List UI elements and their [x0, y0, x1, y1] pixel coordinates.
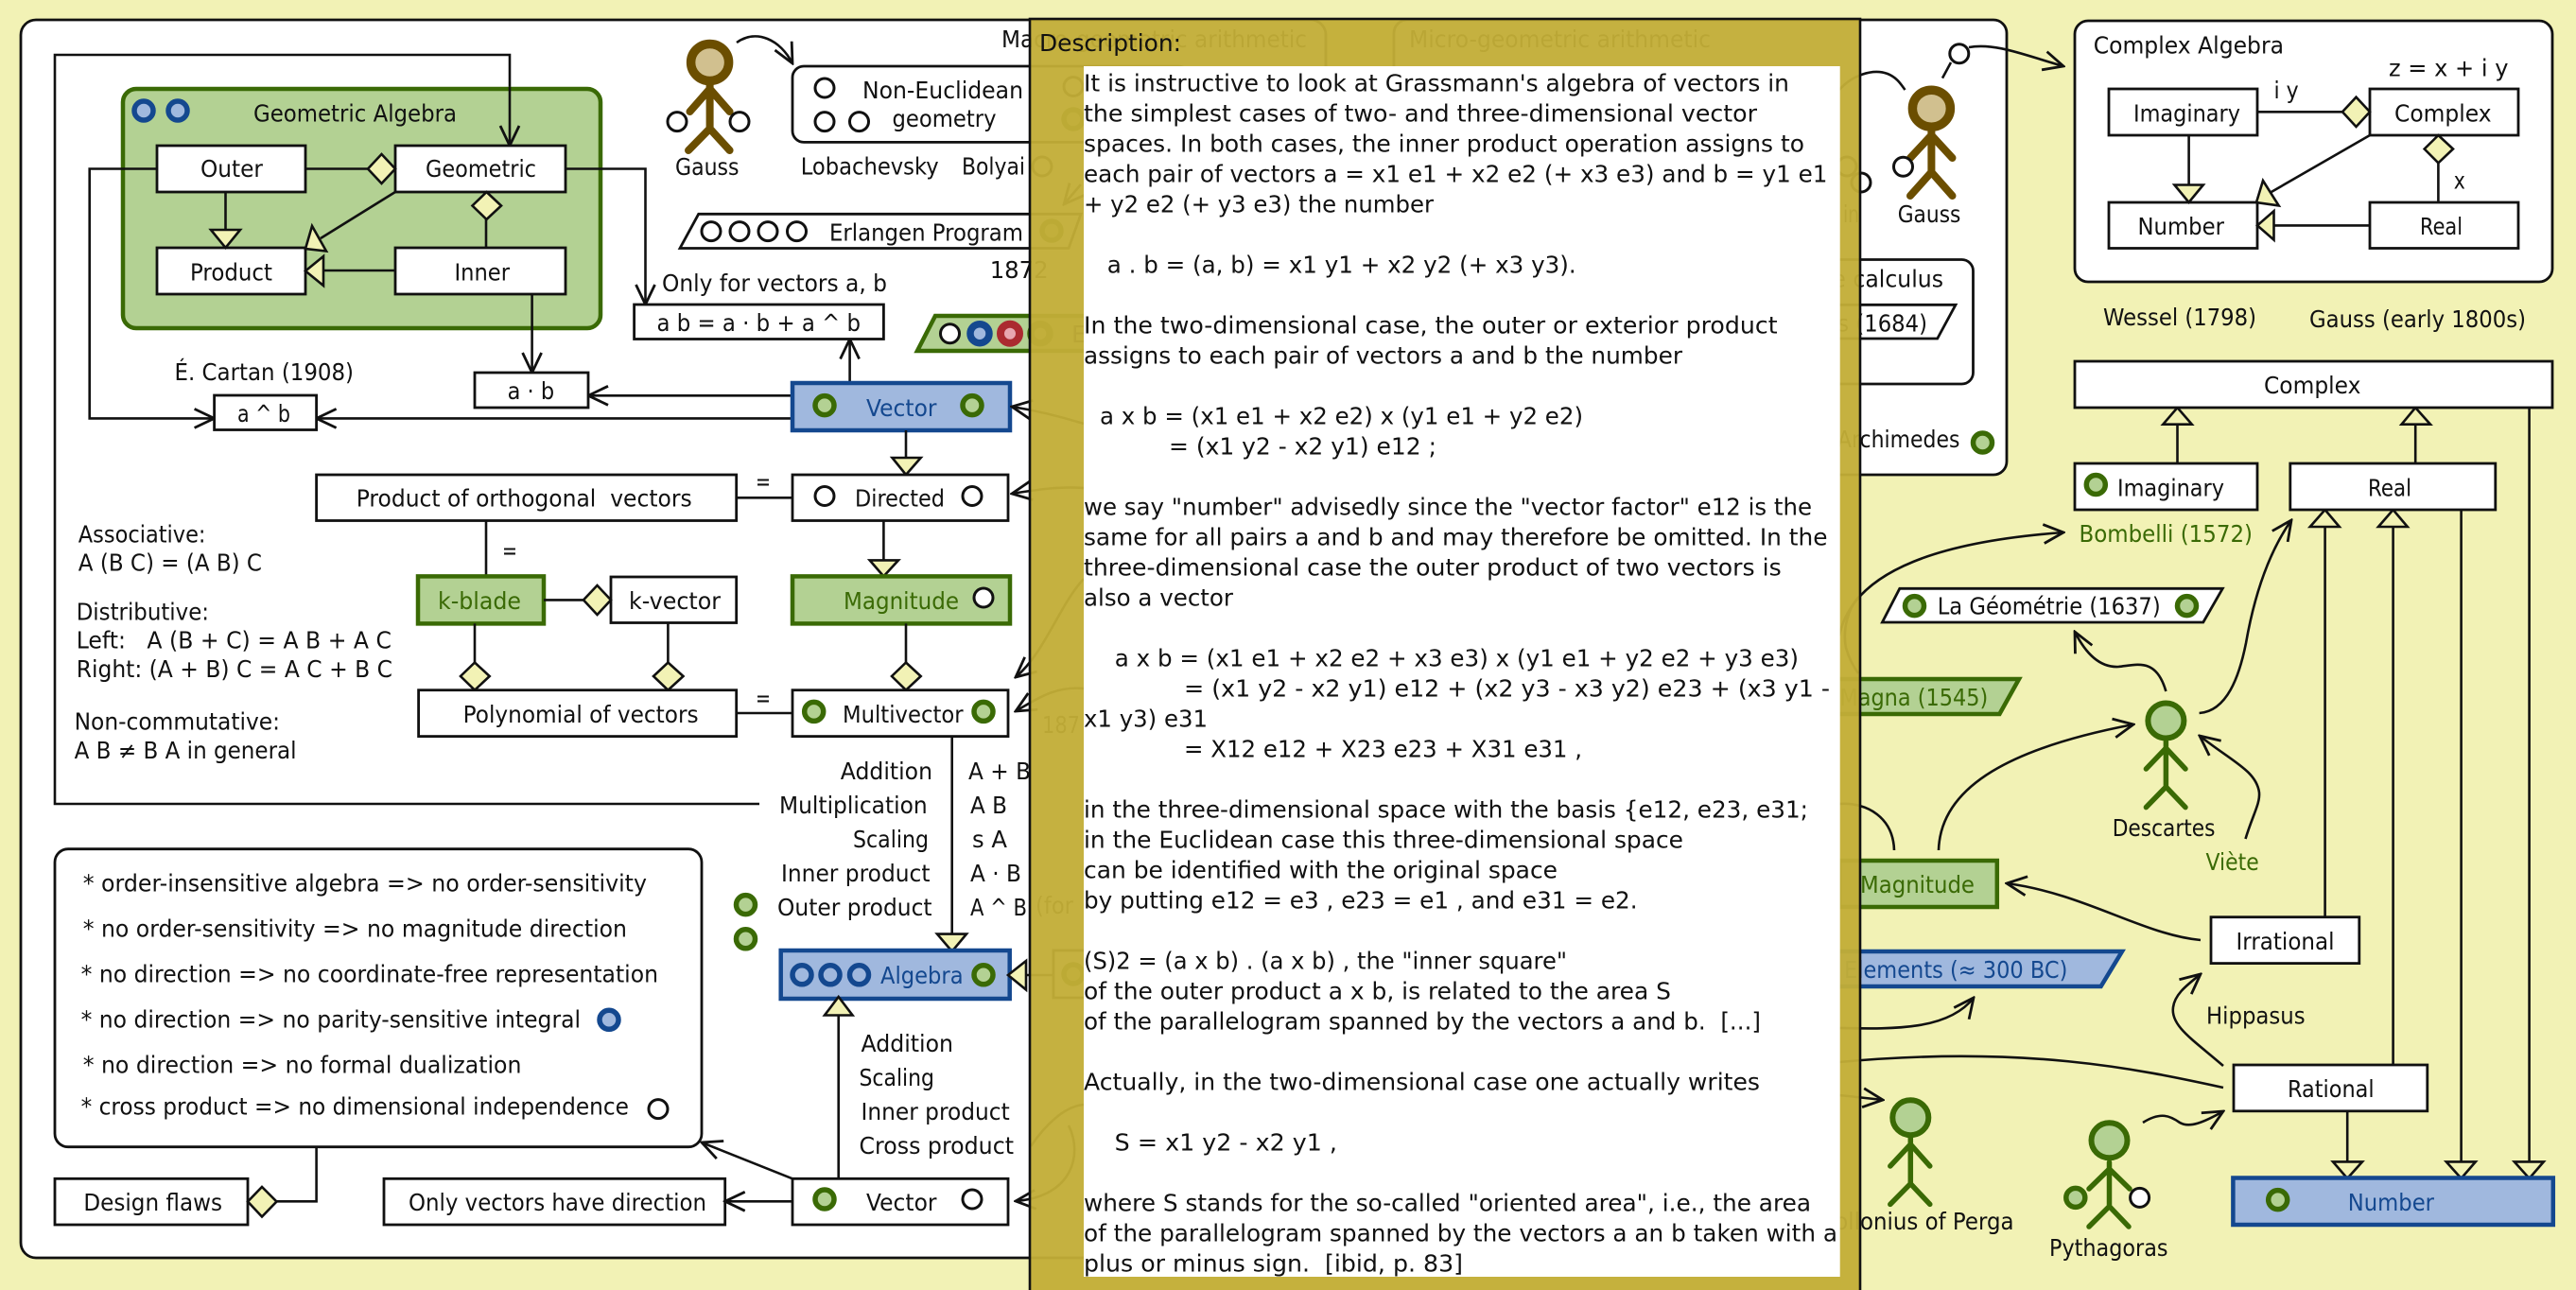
text block: vector operations: Addition — [861, 1030, 953, 1057]
text panel: Grassmann quotation: the simplest cases of two- and three-dimensional vector — [1084, 99, 1758, 127]
text panel: Grassmann quotation: = (x1 y2 - x2 y1) e12 + (x2 y3 - x3 y2) e23 + (x3 y1 - — [1184, 674, 1830, 702]
connectors: diamonds to polynomial and multivector — [461, 622, 921, 690]
box: Magnitude right: Magnitude — [1860, 871, 1975, 898]
connectors: Geometric to ab, Inner to a.b, Outer to a^b — [90, 168, 850, 418]
box: Vector blue: Vector — [866, 394, 937, 422]
panel: design flaw list — [55, 849, 702, 1147]
box: Vector white — [792, 1178, 1008, 1225]
figure: Gauss right — [1837, 44, 1969, 228]
box: Inner — [395, 248, 566, 294]
labels: Wessel and Gauss: Wessel (1798) — [2103, 304, 2256, 331]
panel: Micro-geometric arithmetic — [1394, 20, 2007, 475]
box: Product — [157, 248, 305, 294]
box: Number: Number — [2137, 213, 2225, 240]
box: Real: Real — [2420, 213, 2463, 240]
box: k-vector — [611, 577, 737, 622]
panel: Description overlay — [1030, 19, 1860, 1290]
text panel: Grassmann quotation: of the parallelogram spanned by the vectors a an b taken with a — [1084, 1219, 1837, 1246]
tag: La Géométrie: La Géométrie (1637) — [1938, 592, 2161, 620]
tag: Elements — [1778, 951, 2122, 986]
box: Real large: Real — [2368, 475, 2411, 502]
text panel: Grassmann quotation: (S)2 = (a x b) . (a x b) , the "inner square" — [1084, 947, 1567, 974]
curves: Gauss connections — [1839, 46, 2063, 90]
box: Imaginary with dot — [2075, 463, 2257, 510]
figure: Gauss left — [668, 44, 749, 181]
connectors: design flaws — [248, 1142, 792, 1216]
text panel: Grassmann quotation: In the two-dimensional case, the outer or exterior product — [1084, 311, 1778, 339]
box: Outer — [157, 146, 305, 192]
box: Product of orthogonal vectors: Product of orthogonal vectors — [357, 485, 692, 513]
curved arrows: history of number — [1839, 520, 2291, 1124]
figure: Pythagoras: Pythagoras — [2049, 1234, 2167, 1262]
box: Non-Euclidean geometry — [792, 66, 1190, 142]
text block: algebra laws: Non-commutative: — [75, 708, 280, 736]
box: Vector white: Vector — [866, 1189, 937, 1216]
box: Number — [2109, 202, 2257, 248]
box: a wedge b — [215, 395, 317, 429]
label: Cartan: É. Cartan (1908) — [174, 358, 354, 386]
text panel: Grassmann quotation: Actually, in the two-dimensional case one actually writes — [1084, 1068, 1760, 1095]
box: Magnitude: Magnitude — [844, 587, 959, 615]
tag: Erlangen Program — [680, 214, 1081, 248]
tag: Ars Magna: Ars Magna (1545) — [1799, 684, 1988, 711]
box: calculus: Nova Methodus (1684) — [1681, 309, 1927, 337]
box: Imaginary: Imaginary — [2133, 100, 2240, 128]
text block: operations left: Addition — [841, 758, 932, 785]
box: a dot b — [475, 373, 588, 408]
text block: vector operations — [859, 1030, 1014, 1159]
text panel: Grassmann quotation: of the outer product a x b, is related to the area S — [1084, 977, 1671, 1004]
connectors: equality links: = — [756, 685, 771, 712]
text panel: Grassmann quotation: S = x1 y2 - x2 y1 , — [1115, 1128, 1337, 1156]
box: calculus — [1608, 259, 1973, 384]
box: a dot b: a · b — [508, 377, 554, 405]
text panel: Grassmann quotation — [1084, 66, 1840, 1277]
text block: algebra laws: Distributive: — [77, 598, 209, 625]
inheritance: Directed to Magnitude — [870, 520, 898, 576]
text panel: Grassmann quotation: = (x1 y2 - x2 y1) e12 ; — [1169, 432, 1436, 460]
box: ab formula — [635, 305, 883, 339]
text panel: Grassmann quotation: by putting e12 = e3 , e23 = e1 , and e31 = e2. — [1084, 886, 1638, 914]
figure: Pythagoras — [2049, 1123, 2167, 1262]
box: Polynomial of vectors: Polynomial of vectors — [463, 701, 699, 728]
box: Multivector — [792, 690, 1008, 737]
text block: algebra laws — [75, 521, 392, 764]
text block: operations left: Outer product — [777, 894, 932, 921]
text panel: Grassmann quotation: of the parallelogram spanned by the vectors a and b. [...] — [1084, 1007, 1761, 1035]
box: Number large: Number — [2348, 1189, 2435, 1216]
box: Algebra: Algebra — [880, 962, 964, 989]
figure: Gauss right: in — [1843, 200, 1859, 228]
box: Complex large: Complex — [2264, 372, 2360, 399]
box: Polynomial of vectors — [419, 690, 737, 737]
box: k-blade: k-blade — [438, 587, 521, 615]
text panel: Grassmann quotation: + y2 e2 (+ y3 e3) the number — [1084, 190, 1435, 218]
panel: Geometric Algebra — [123, 87, 600, 328]
label: Only for vectors: Only for vectors a, b — [662, 270, 887, 297]
box: Complex: Complex — [2394, 100, 2492, 128]
text block: algebra laws: Left: A (B + C) = A B + A C — [77, 626, 392, 654]
outer connector frame — [55, 55, 759, 804]
box: ab formula: a b = a · b + a ^ b — [656, 309, 861, 337]
icon: blue dots — [134, 101, 187, 120]
text block: operations right: A + B — [968, 758, 1031, 785]
box: Real — [2370, 202, 2518, 248]
box: calculus: Infinite calculus — [1768, 266, 1943, 293]
panel: design flaw list: * no direction => no formal dualization — [83, 1052, 521, 1079]
box: Real large — [2290, 463, 2496, 510]
box: Number large — [2233, 1178, 2553, 1225]
connector: Algebra to hidden box — [1008, 950, 1148, 998]
tag: green parallelogram with dots: E — [1071, 321, 1087, 348]
box: Irrational: Irrational — [2236, 928, 2334, 955]
text block: vector operations: Cross product — [859, 1132, 1014, 1159]
label: Bombelli: Bombelli (1572) — [2079, 520, 2253, 548]
text panel: Grassmann quotation: a x b = (x1 e1 + x2 e2 + x3 e3) x (y1 e1 + y2 e2 + y3 e3) — [1115, 644, 1799, 671]
tag: La Géométrie — [1882, 588, 2222, 622]
box: Outer: Outer — [200, 155, 264, 183]
labels: Lobachevsky and Bolyai: Lobachevsky — [801, 152, 939, 180]
text block: operations right: 187 — [1042, 711, 1080, 739]
text panel: Grassmann quotation: also a vector — [1084, 584, 1234, 611]
panel: Complex Algebra: x — [2454, 166, 2465, 195]
label: 1872: 1872 — [990, 256, 1049, 284]
connectors: equality links: = — [756, 468, 771, 496]
box: Directed — [792, 475, 1008, 520]
connectors: equality links — [486, 468, 792, 713]
box: Geometric — [395, 146, 566, 192]
box: Only vectors have direction — [384, 1178, 725, 1225]
box: k-vector: k-vector — [629, 587, 722, 615]
panel: design flaw list: * order-insensitive algebra => no order-sensitivity — [83, 870, 647, 898]
text block: algebra laws: A (B C) = (A B) C — [78, 549, 262, 577]
text panel: Grassmann quotation: same for all pairs a and b and may therefore be omitted. In the — [1084, 523, 1827, 550]
text panel: Grassmann quotation: a . b = (a, b) = x1 y1 + x2 y2 (+ x3 y3). — [1107, 251, 1576, 278]
text block: algebra laws: Right: (A + B) C = A C + B C — [77, 655, 392, 683]
box: Non-Euclidean geometry: geometry — [893, 105, 997, 132]
box: Multivector: Multivector — [843, 701, 964, 728]
box: Geometric: Geometric — [426, 155, 536, 183]
panel: design flaw list: * cross product => no dimensional independence — [81, 1092, 629, 1120]
labels: Wessel and Gauss: Gauss (early 1800s) — [2309, 305, 2526, 333]
figure: Descartes — [2113, 704, 2215, 842]
text block: operations right: (for — [1036, 892, 1074, 919]
box: Product of orthogonal vectors — [317, 475, 737, 520]
heading: Description: Description: — [1039, 29, 1181, 57]
box: Magnitude right — [1839, 861, 1997, 907]
inheritance: Vector to Directed — [893, 430, 921, 475]
text panel: Grassmann quotation: = X12 e12 + X23 e23 + X31 e31 , — [1184, 735, 1582, 762]
labels: Lobachevsky and Bolyai — [801, 152, 1081, 204]
figure: Apollonius of Perga: Apollonius of Perga — [1806, 1208, 2014, 1235]
text block: algebra laws: A B ≠ B A in general — [75, 737, 297, 764]
labels: Lobachevsky and Bolyai: Bolyai — [962, 152, 1025, 180]
figure: Gauss right: Gauss — [1898, 200, 1960, 228]
text block: operations left: Multiplication — [779, 792, 928, 819]
text panel: Grassmann quotation: x1 y3) e31 — [1084, 705, 1208, 732]
panel: design flaw list: * no direction => no coordinate-free representation — [81, 961, 658, 988]
box: Inner: Inner — [454, 259, 511, 286]
box: Irrational — [2211, 917, 2359, 964]
text block: operations left: Inner product — [781, 860, 931, 887]
text block: vector operations: Inner product — [861, 1098, 1010, 1125]
text block: vector operations: Scaling — [859, 1064, 934, 1091]
text panel: Grassmann quotation: can be identified with the original space — [1084, 856, 1558, 883]
text block: operations right: A ^ B — [970, 894, 1027, 921]
box: k-blade — [418, 576, 544, 623]
connectors: equality links: = — [502, 537, 517, 565]
panel: Complex Algebra: i y — [2273, 77, 2299, 104]
panel: Complex Algebra: Complex Algebra — [2094, 32, 2284, 60]
text block: operations right: A · B — [970, 860, 1021, 887]
text panel: Grassmann quotation: It is instructive to look at Grassmann's algebra of vectors in — [1084, 69, 1789, 96]
text panel: Grassmann quotation: assigns to each pair of vectors a and b the number — [1084, 341, 1683, 369]
box: Non-Euclidean geometry: Non-Euclidean — [862, 77, 1023, 104]
figure: Apollonius of Perga — [1806, 1100, 2014, 1235]
connectors inside Geometric Algebra — [211, 154, 501, 286]
text block: operations right: s A — [972, 826, 1007, 853]
connector: k-blade to k-vector — [544, 585, 611, 615]
text block: algebra laws: Associative: — [78, 521, 206, 549]
connectors inside Complex Algebra — [2174, 97, 2453, 240]
inheritance: Vector to Algebra — [825, 997, 853, 1178]
box: a wedge b: a ^ b — [237, 400, 290, 427]
text panel: Grassmann quotation: each pair of vectors a = x1 e1 + x2 e2 (+ x3 e3) and b = y1 e1 — [1084, 160, 1827, 187]
text panel: Grassmann quotation: spaces. In both cases, the inner product operation assigns to — [1084, 130, 1804, 157]
tag: green parallelogram with dots — [917, 316, 1125, 351]
connectors: number hierarchy lines — [2163, 408, 2544, 1178]
figure: Descartes: Descartes — [2113, 814, 2215, 842]
tag: Ars Magna — [1778, 679, 2019, 714]
label: Archimedes: Archimedes — [1837, 426, 1959, 453]
heading: Macro-geometric arithmetic: Macro-geometric arithmetic — [1001, 26, 1307, 53]
text panel: Grassmann quotation: three-dimensional case the outer product of two vectors is — [1084, 553, 1782, 581]
labels: Wessel and Gauss — [2103, 304, 2526, 333]
box: Complex — [2370, 89, 2518, 135]
box: Only vectors have direction: Only vectors have direction — [409, 1189, 706, 1216]
tag: Erlangen Program: Erlangen Program — [829, 219, 1023, 246]
connectors: arrows from hidden centre to left boxes — [1012, 407, 1084, 1201]
label: Viète: Viète — [2205, 848, 2259, 876]
label: Gauss: Gauss — [675, 153, 740, 181]
text panel: Grassmann quotation: where S stands for the so-called "oriented area", i.e., the area — [1084, 1189, 1811, 1216]
inheritance: Multivector to Algebra — [937, 737, 966, 951]
text block: operations right: A B — [970, 792, 1007, 819]
text panel: Grassmann quotation: plus or minus sign. [ibid, p. 83] — [1084, 1249, 1463, 1277]
text panel: Grassmann quotation: in the three-dimensional space with the basis {e12, e23, e31; — [1084, 795, 1808, 823]
box: Magnitude — [792, 576, 1010, 623]
panel: design flaw list: * no direction => no parity-sensitive integral — [81, 1006, 581, 1034]
text panel: Grassmann quotation: we say "number" advisedly since the "vector factor" e12 is the — [1084, 493, 1812, 520]
box: Rational — [2234, 1065, 2428, 1111]
text panel: Grassmann quotation: a x b = (x1 e1 + x2 e2) x (y1 e1 + y2 e2) — [1100, 402, 1583, 429]
text block: operations left: Scaling — [853, 826, 929, 853]
box: Vector blue — [792, 383, 1010, 430]
box: Directed: Directed — [855, 485, 945, 513]
text block: operations right — [968, 711, 1080, 921]
label: Hippasus: Hippasus — [2206, 1002, 2306, 1029]
box: Product: Product — [190, 259, 272, 286]
tag: Elements: Elements (≈ 300 BC) — [1844, 956, 2067, 984]
box: Algebra — [781, 950, 1010, 999]
arrow: Gauss to non-Euclidean — [737, 36, 792, 63]
panel: design flaw list: * no order-sensitivity => no magnitude direction — [83, 915, 627, 943]
text block: operations left — [736, 758, 932, 949]
heading: Micro-geometric arithmetic: Micro-geometric arithmetic — [1409, 26, 1711, 53]
heading: Geometric Algebra: Geometric Algebra — [253, 100, 457, 127]
panel: Complex Algebra: z = x + i y — [2389, 54, 2508, 81]
box: Design flaws: Design flaws — [83, 1189, 222, 1216]
box: Imaginary — [2109, 89, 2257, 135]
box: Rational: Rational — [2288, 1075, 2375, 1103]
panel: Complex Algebra — [2075, 21, 2552, 282]
box: Design flaws — [55, 1178, 248, 1225]
text panel: Grassmann quotation: in the Euclidean case this three-dimensional space — [1084, 826, 1683, 853]
box: Complex large — [2075, 361, 2552, 408]
box: Imaginary with dot: Imaginary — [2117, 475, 2224, 502]
